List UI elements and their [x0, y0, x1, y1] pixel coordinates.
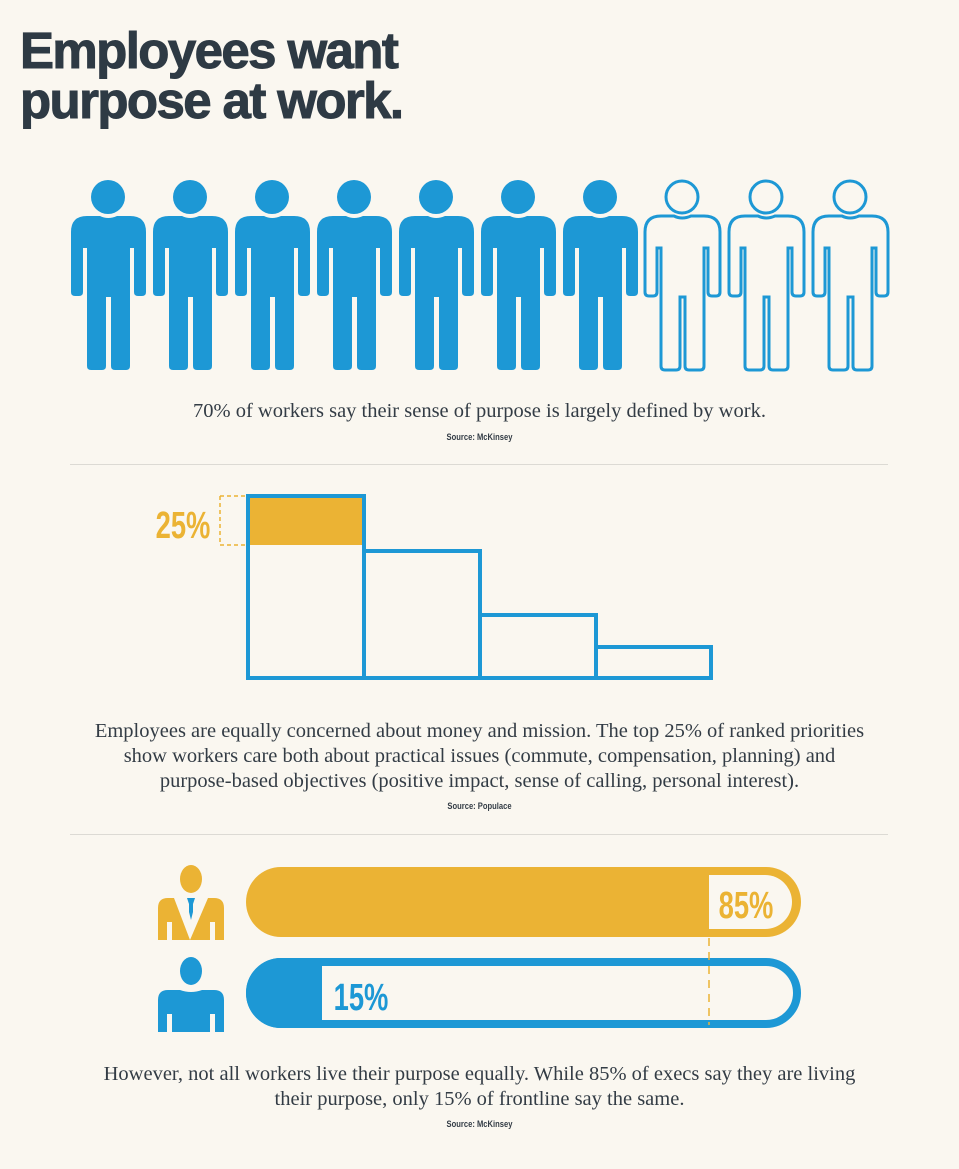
title — [20, 22, 402, 129]
caption 3 — [104, 1063, 855, 1110]
title: purpose at work. — [20, 72, 402, 129]
caption 2: show workers care both about practical issues (commute, compensation, planning) and — [124, 745, 835, 767]
icon: frontline — [158, 957, 224, 1032]
icon: executive — [158, 865, 224, 940]
bar comparison: 15% — [334, 977, 388, 1019]
bar: execs 85% — [246, 867, 801, 937]
caption 2 — [95, 720, 864, 792]
source 3: Source: McKinsey — [447, 1119, 512, 1130]
source 1: Source: McKinsey — [447, 432, 512, 443]
bar: frontline 15% — [250, 962, 797, 1024]
caption 2: Employees are equally concerned about money and mission. The top 25% of ranked priorities — [95, 720, 864, 742]
pictogram: 7 of 10 people — [71, 180, 890, 372]
caption 1: 70% of workers say their sense of purpose is largely defined by work. — [193, 400, 766, 422]
label 25%: 25% — [156, 505, 210, 547]
caption 3: However, not all workers live their purpose equally. While 85% of execs say they are living — [104, 1063, 855, 1085]
caption 3: their purpose, only 15% of frontline say the same. — [275, 1088, 684, 1110]
title: Employees want — [20, 22, 397, 79]
caption 2: purpose-based objectives (positive impact, sense of calling, personal interest). — [160, 770, 799, 792]
bar comparison — [158, 865, 801, 1032]
source 2: Source: Populace — [447, 801, 512, 812]
bar comparison: 85% — [719, 885, 773, 927]
step chart — [156, 494, 713, 680]
